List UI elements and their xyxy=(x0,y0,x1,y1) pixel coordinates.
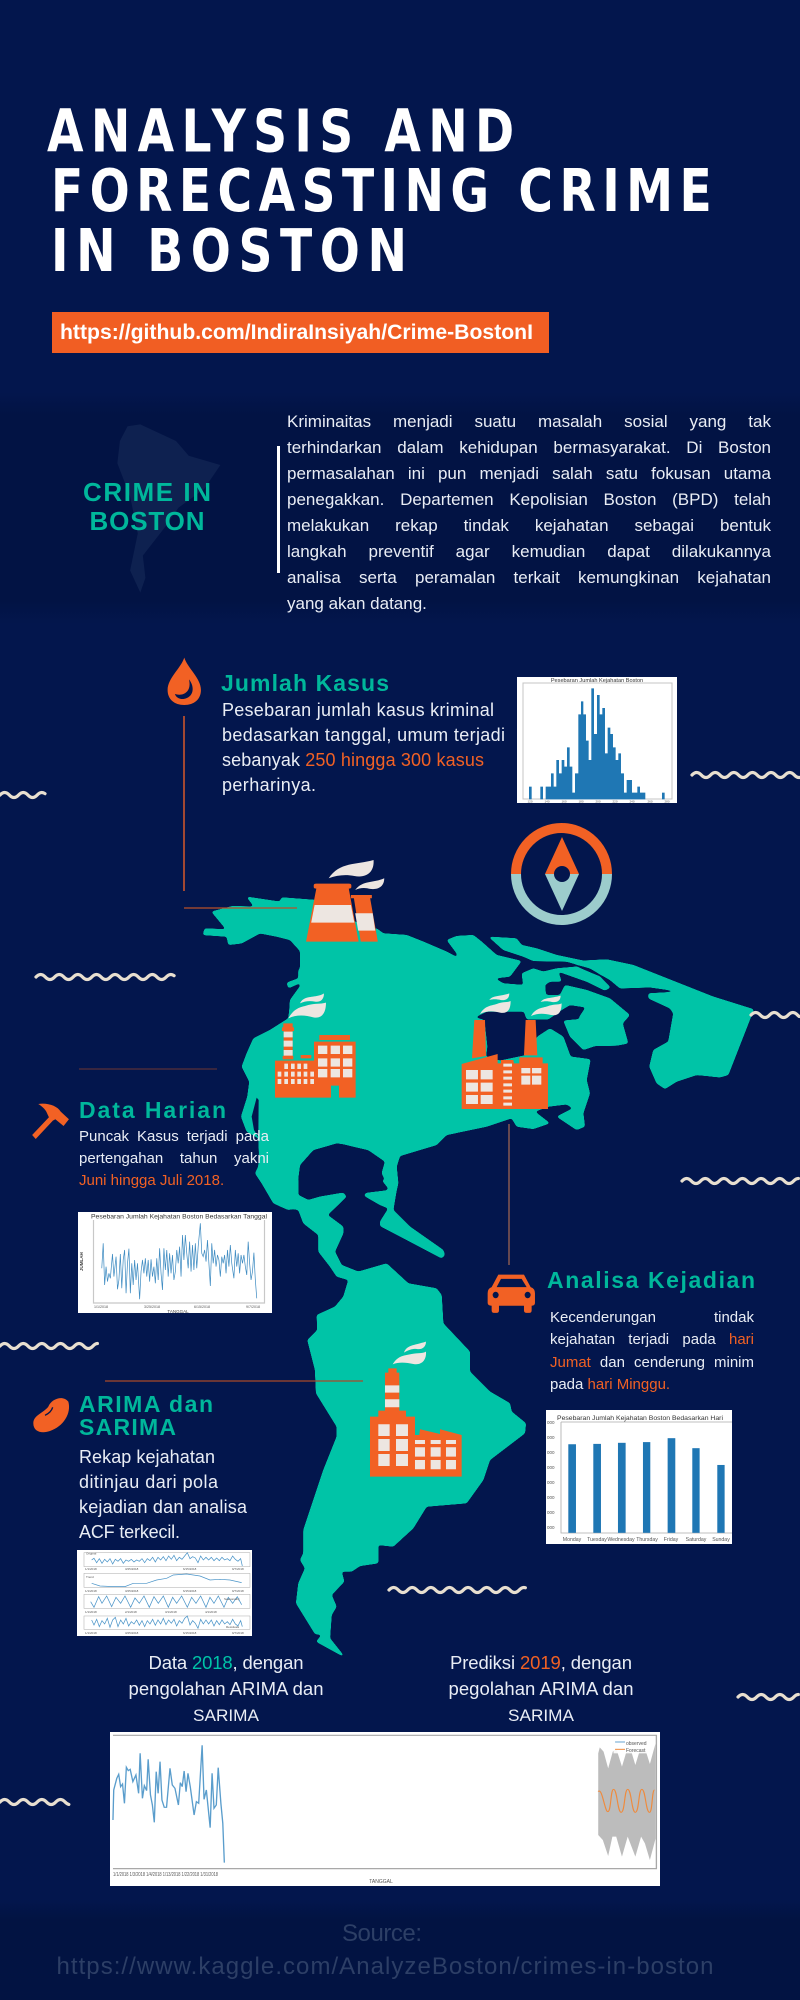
icon: compass xyxy=(516,828,607,920)
chart: decomposition: 9/7/2018 xyxy=(232,1567,244,1571)
caption: data 2018 xyxy=(128,1652,324,1725)
map: americas land xyxy=(203,897,754,1738)
chart: decomposition: Seasonality xyxy=(224,1597,240,1601)
data harian body text xyxy=(79,1128,269,1189)
chart: daily line xyxy=(78,1212,272,1314)
panel: intro background xyxy=(0,392,800,624)
chart: decomposition: 1/1/2018 xyxy=(85,1567,97,1571)
section: arima heading, icon and text xyxy=(33,1391,248,1542)
land: small tip above forecast chart xyxy=(503,1728,527,1738)
land: northeast america xyxy=(300,928,630,1200)
caption: prediksi 2019: SARIMA xyxy=(508,1706,575,1725)
chart: decomposition: 1/1/2018 xyxy=(85,1589,97,1593)
chart: daily line: TANGGAL xyxy=(167,1309,189,1314)
chart: daily bars: Tuesday xyxy=(587,1537,607,1543)
chart: daily line: 6/15/2018 xyxy=(194,1305,210,1309)
icon: south america silhouette xyxy=(117,424,220,593)
heading: crime in boston: CRIME IN xyxy=(83,477,211,507)
chart: decomposition: Trend xyxy=(86,1575,94,1579)
chart: daily bars: Thursday xyxy=(636,1537,658,1543)
body text: sebanyak 250 hingga 300 kasus xyxy=(222,750,484,770)
connector horizontal xyxy=(184,907,297,909)
link banner xyxy=(52,312,549,353)
intro paragraph: yang akan datang. xyxy=(287,594,427,613)
land: arctic arm and greenland xyxy=(488,937,754,1089)
caption: prediksi 2019: Prediksi 2019, dengan xyxy=(450,1652,632,1673)
icon: factory south xyxy=(370,1342,462,1477)
icon: factory east xyxy=(462,993,562,1109)
baja inlet xyxy=(252,1098,259,1137)
intro paragraph: langkah preventif agar kemudian dapat dilakukannya xyxy=(287,542,771,561)
intro paragraph: penegakkan. Departemen Kepolisian Boston (BPD) telah xyxy=(287,490,771,509)
source xyxy=(56,1920,714,1980)
chart: decomposition: 3/25/2018 xyxy=(125,1567,139,1571)
icon: drop xyxy=(168,658,201,705)
link banner: https://github.com/IndiraInsiyah/Crime-BostonI xyxy=(60,321,533,344)
heading: Analisa Kejadian xyxy=(547,1267,755,1293)
chart: decomposition: Original xyxy=(86,1552,97,1556)
title xyxy=(47,96,712,285)
chart: daily line: 3/25/2018 xyxy=(144,1305,160,1309)
body text xyxy=(79,1447,248,1542)
heading: Data Harian xyxy=(79,1097,226,1123)
chart: decomposition: 3/25/2018 xyxy=(125,1631,139,1635)
chart: daily line: JUMLAH xyxy=(79,1252,84,1271)
chart: decomposition xyxy=(77,1550,252,1636)
chart: decomposition: 6/15/2018 xyxy=(183,1589,197,1593)
chart: daily bars: 000 xyxy=(547,1480,555,1485)
data harian body text: pertengahan tahun yakni xyxy=(79,1150,269,1167)
chart: daily line: Pesebaran Jumlah Kejahatan Boston Bedasarkan Tanggal xyxy=(91,1214,267,1220)
intro paragraph: permasalahan ini pun menjadi salah satu fokusan utama xyxy=(287,464,771,483)
chart: decomposition: 4/1/2018 xyxy=(205,1610,217,1614)
chart: decomposition: 6/15/2018 xyxy=(183,1631,197,1635)
chart: forecast: 1/1/2018 1/3/2018 1/4/2018 1/13/2018 1/22/2018 1/31/2018 xyxy=(113,1872,218,1878)
chart: daily bars: 000 xyxy=(547,1465,555,1470)
land: caribbean strip xyxy=(363,1180,445,1258)
chart: decomposition: 9/7/2018 xyxy=(232,1589,244,1593)
caption: data 2018: SARIMA xyxy=(193,1706,260,1725)
chart: daily bars xyxy=(546,1410,732,1544)
title: IN BOSTON xyxy=(51,216,407,285)
icon: factory west xyxy=(275,993,356,1098)
chart: histogram: 220 xyxy=(612,800,618,804)
connector lines xyxy=(183,716,185,891)
caption: data 2018: pengolahan ARIMA dan xyxy=(128,1678,324,1699)
intro paragraph xyxy=(287,412,771,613)
caption: prediksi 2019 xyxy=(448,1652,634,1725)
chart: decomposition: 6/15/2018 xyxy=(183,1567,197,1571)
analisa kejadian body text: Jumat dan cenderung minim xyxy=(550,1354,754,1371)
body text xyxy=(222,700,505,795)
chart: daily bars: Saturday xyxy=(686,1537,707,1543)
body text: ditinjau dari pola xyxy=(79,1472,219,1492)
source: https://www.kaggle.com/AnalyzeBoston/crimes-in-boston xyxy=(56,1953,714,1980)
heading: SARIMA xyxy=(79,1414,176,1440)
chart: decomposition: 9/7/2018 xyxy=(232,1631,244,1635)
title: ANALYSIS AND xyxy=(47,96,514,166)
chart: forecast: observed xyxy=(626,1741,647,1747)
intro paragraph: melakukan rekap tindak kejahatan sebagai bentuk xyxy=(287,516,771,535)
chart: daily line: 9/7/2018 xyxy=(246,1305,260,1309)
chart: histogram: 280 xyxy=(664,800,670,804)
intro paragraph: analisa serta peramalan terkait kemungkinan kejahatan xyxy=(287,568,771,587)
analisa kejadian body text: kejahatan terjadi pada hari xyxy=(550,1331,754,1348)
chart: histogram: 140 xyxy=(544,800,550,804)
section: jumlah kasus xyxy=(168,658,505,908)
chart: decomposition: 2/1/2018 xyxy=(125,1610,137,1614)
chart: histogram: 160 xyxy=(561,800,567,804)
caption: data 2018: Data 2018, dengan xyxy=(148,1652,304,1673)
chart: decomposition: Residuals xyxy=(226,1625,240,1629)
chart: forecast: TANGGAL xyxy=(369,1879,393,1885)
chart: decomposition: 1/1/2018 xyxy=(85,1610,97,1614)
chart: decomposition: 1/1/2018 xyxy=(85,1631,97,1635)
chart: daily bars: Pesebaran Jumlah Kejahatan Boston Bedasarkan Hari xyxy=(557,1416,723,1422)
heading xyxy=(79,1391,213,1440)
icon: car xyxy=(488,1275,535,1313)
icon: bean xyxy=(33,1398,69,1432)
chart: forecast: Forecast xyxy=(626,1748,646,1754)
connector: data harian rule xyxy=(79,1068,217,1070)
body text: kejadian dan analisa xyxy=(79,1497,248,1517)
chart: histogram: 180 xyxy=(578,800,584,804)
waves xyxy=(0,772,800,1804)
chart: daily bars: Monday xyxy=(563,1537,582,1543)
chart: daily bars: Friday xyxy=(664,1537,679,1543)
analisa kejadian body text: Kecenderungan tindak xyxy=(550,1309,754,1326)
chart: daily bars: 000 xyxy=(547,1435,555,1440)
body text: Rekap kejahatan xyxy=(79,1447,215,1467)
chart: daily bars: 000 xyxy=(547,1510,555,1515)
icon: cooling towers xyxy=(306,860,384,942)
section: analisa heading and icon xyxy=(488,1267,755,1313)
chart: daily bars: Wednesday xyxy=(607,1537,635,1543)
chart: histogram: 240 xyxy=(629,800,635,804)
body text: perharinya. xyxy=(222,775,316,795)
chart: decomposition: 3/25/2018 xyxy=(125,1589,139,1593)
chart: daily line: 1/1/2018 xyxy=(94,1305,108,1309)
title: FORECASTING CRIME xyxy=(51,156,712,225)
analisa kejadian body text: pada hari Minggu. xyxy=(550,1376,670,1393)
chart: daily bars: 000 xyxy=(547,1525,555,1530)
data harian body text: Juni hingga Juli 2018. xyxy=(79,1172,224,1189)
chart: daily bars: 000 xyxy=(547,1420,555,1425)
chart: histogram: 200 xyxy=(595,800,601,804)
body text: Pesebaran jumlah kasus kriminal xyxy=(222,700,494,720)
intro paragraph: terhindarkan dalam kehidupan bermasyarakat. Di Boston xyxy=(287,438,771,457)
body text: ACF terkecil. xyxy=(79,1522,180,1542)
connector: arima xyxy=(105,1380,363,1382)
body text: bedasarkan tanggal, umum terjadi xyxy=(222,725,505,745)
icon: hammer xyxy=(32,1104,69,1139)
source: Source: xyxy=(342,1920,422,1947)
land: northwest america xyxy=(203,897,423,1210)
analisa kejadian body text xyxy=(550,1309,754,1393)
land: central america and south america xyxy=(280,1180,526,1657)
chart: daily bars: Sunday xyxy=(712,1537,730,1543)
heading: crime in boston: BOSTON xyxy=(90,506,204,536)
heading: crime in boston xyxy=(83,477,211,536)
chart: histogram: 120 xyxy=(527,800,533,804)
chart: histogram: 260 xyxy=(647,800,653,804)
chart: daily bars: 000 xyxy=(547,1450,555,1455)
footer background xyxy=(0,1900,800,2000)
chart: decomposition: 3/1/2018 xyxy=(165,1610,177,1614)
divider bar xyxy=(277,446,280,573)
chart: histogram: Pesebaran Jumlah Kejahatan Boston xyxy=(551,678,643,684)
data harian body text: Puncak Kasus terjadi pada xyxy=(79,1128,269,1145)
section: data harian heading and icon xyxy=(32,1097,226,1139)
chart: forecast xyxy=(110,1732,660,1886)
connector: analisa kejadian xyxy=(508,1124,510,1265)
caption: prediksi 2019: pegolahan ARIMA dan xyxy=(448,1678,634,1699)
chart: daily bars: 000 xyxy=(547,1495,555,1500)
chart: histogram xyxy=(517,677,677,804)
heading: Jumlah Kasus xyxy=(221,670,389,696)
intro paragraph: Kriminaitas menjadi suatu masalah sosial yang tak xyxy=(287,412,771,431)
heading: ARIMA dan xyxy=(79,1391,213,1417)
